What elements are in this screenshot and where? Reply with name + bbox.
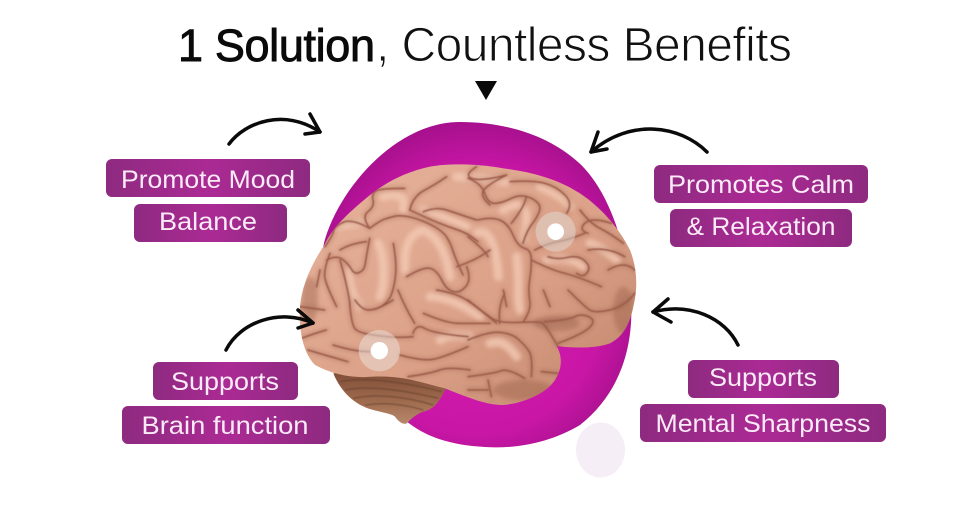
highlight dot: parietal [536, 212, 576, 252]
label: Brain function: Brain function [142, 412, 308, 440]
egg-shaped magenta backdrop [321, 122, 631, 447]
label: & Relaxation: & Relaxation [686, 213, 836, 241]
label: Promote Mood: Promote Mood [121, 166, 295, 194]
highlight dot: temporal [359, 330, 400, 371]
title: , Countless Benefits [376, 19, 792, 72]
label: Promotes Calm: Promotes Calm [668, 171, 854, 199]
faint egg decoration [576, 422, 625, 478]
sulci lines [300, 167, 635, 397]
label: & Relaxation [670, 209, 852, 247]
title [178, 19, 792, 72]
cerebellum [333, 371, 446, 424]
label: Mental Sharpness: Mental Sharpness [656, 410, 870, 438]
darker shaded zones [302, 277, 633, 400]
label: Supports (left) [153, 362, 298, 400]
cerebrum base [300, 164, 636, 405]
icon: down triangle [475, 81, 497, 100]
brain illustration [300, 164, 636, 424]
arrow: top right [591, 129, 707, 152]
arrow: bottom left [226, 310, 313, 350]
label: Balance: Balance [159, 208, 257, 236]
sulci soft shadow [300, 167, 635, 397]
gyri highlights [337, 177, 617, 357]
label: Supports (right): Supports [709, 364, 817, 392]
title: 1 Solution [178, 20, 375, 71]
label: Supports (right) [688, 360, 839, 398]
label: Balance [134, 204, 287, 242]
label: Supports (left): Supports [171, 368, 279, 396]
arrow: bottom right [653, 299, 738, 345]
label: Promote Mood [106, 159, 310, 197]
label: Brain function [122, 406, 330, 444]
label: Mental Sharpness [640, 404, 886, 442]
arrow: top left [229, 114, 320, 144]
label: Promotes Calm [654, 165, 868, 203]
